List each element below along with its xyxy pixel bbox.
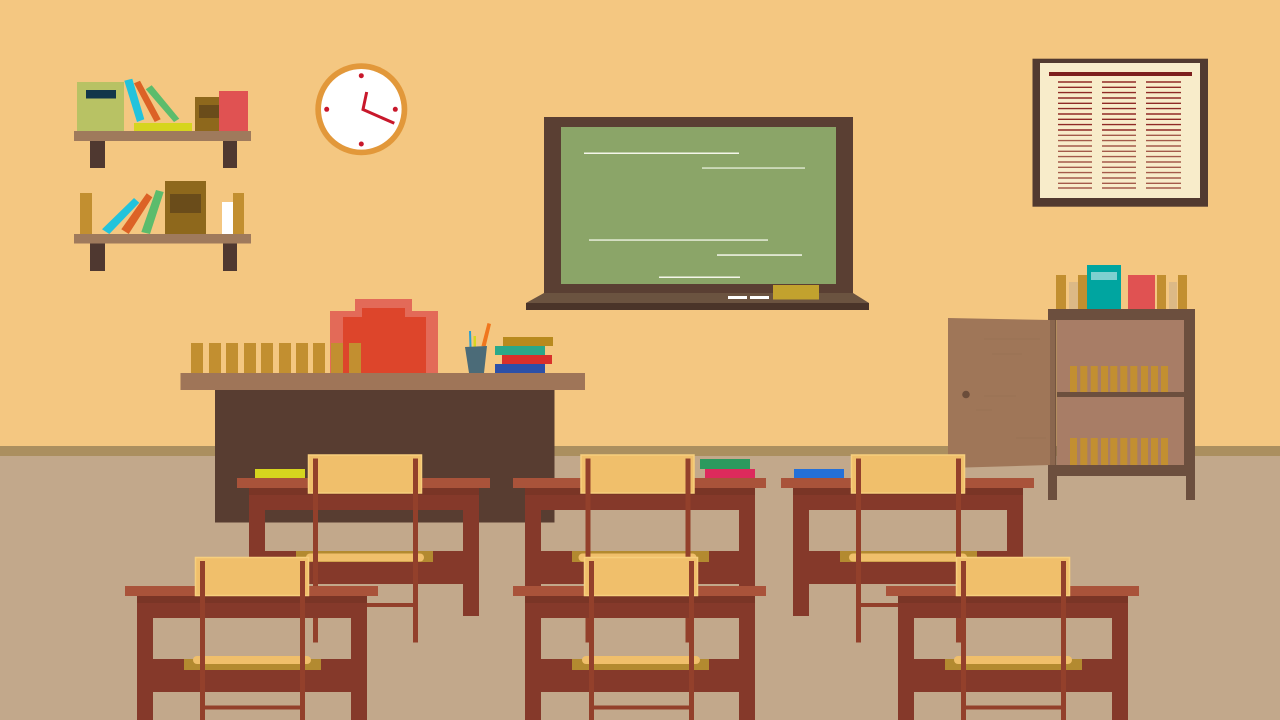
front row chair right xyxy=(954,558,1072,720)
wall xyxy=(0,0,1280,447)
teacher's desk xyxy=(180,373,585,522)
lower wall shelf with books xyxy=(74,181,251,271)
back row student desk right xyxy=(781,469,1034,616)
framed poster xyxy=(1032,59,1208,207)
back row student desk centre xyxy=(513,459,766,616)
teacher's desk items xyxy=(191,299,553,373)
front row student desk left xyxy=(125,586,378,720)
front row chair left xyxy=(193,558,311,720)
cabinet with open door and books xyxy=(948,265,1195,500)
floor xyxy=(0,456,1280,720)
chalkboard xyxy=(526,117,869,310)
back row chair centre xyxy=(578,455,696,642)
back row chair left xyxy=(306,455,424,642)
upper wall shelf with books xyxy=(74,79,251,168)
front row chair centre xyxy=(582,558,700,720)
baseboard xyxy=(0,446,1280,456)
front row student desk centre xyxy=(513,586,766,720)
front row student desk right xyxy=(886,586,1139,720)
back row chair right xyxy=(849,455,967,642)
back row student desk left xyxy=(237,469,490,616)
wall clock xyxy=(315,63,407,155)
